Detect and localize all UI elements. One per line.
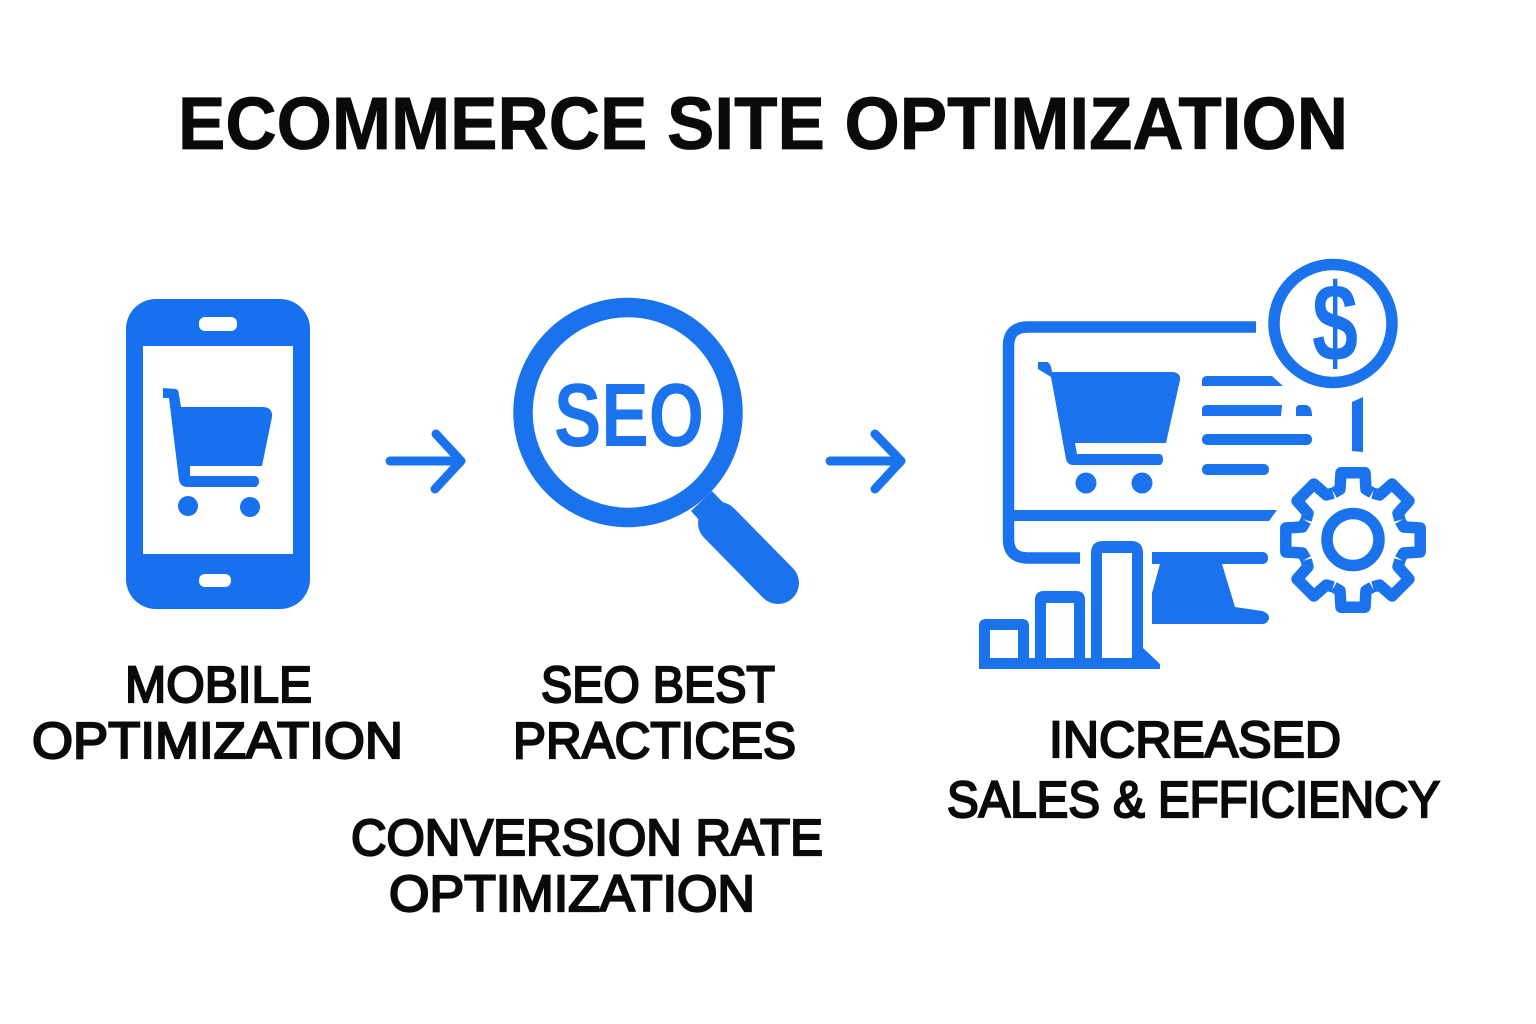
label: SEO best practices (513, 656, 796, 769)
bar chart (979, 541, 1160, 669)
arrow: mobile to SEO (390, 434, 461, 489)
icon: monitor with cart, coin, gear and bars (979, 262, 1420, 669)
title: ECOMMERCE SITE OPTIMIZATION (178, 82, 1348, 165)
label: mobile optimization: OPTIMIZATION (32, 712, 403, 769)
connector bar (1352, 397, 1363, 452)
label: increased sales and efficiency: SALES & EFFICIENCY (947, 771, 1440, 828)
monitor stand (1152, 552, 1269, 624)
label: increased sales and efficiency (947, 711, 1440, 828)
label: SEO best practices: PRACTICES (513, 712, 796, 769)
icon: SEO magnifying glass: SEO (554, 366, 704, 466)
label: conversion rate optimization: OPTIMIZATION (389, 865, 755, 922)
monitor frame (1008, 327, 1256, 558)
label: mobile optimization (32, 656, 403, 769)
gear (1286, 473, 1420, 607)
cart on screen (1038, 362, 1180, 465)
arrow: SEO to results (830, 434, 901, 489)
icon: smartphone with cart (126, 299, 310, 609)
product text lines (1202, 376, 1283, 386)
label: mobile optimization: MOBILE (125, 656, 312, 713)
label: increased sales and efficiency: INCREASED (1049, 711, 1341, 768)
monitor divider (1012, 510, 1277, 521)
dollar coin (1274, 262, 1392, 385)
label: conversion rate optimization (351, 809, 823, 922)
icon: SEO magnifying glass (523, 308, 778, 583)
label: SEO best practices: SEO BEST (541, 656, 775, 713)
dollar coin: $ (1312, 262, 1358, 385)
label: conversion rate optimization: CONVERSION RATE (351, 809, 823, 866)
